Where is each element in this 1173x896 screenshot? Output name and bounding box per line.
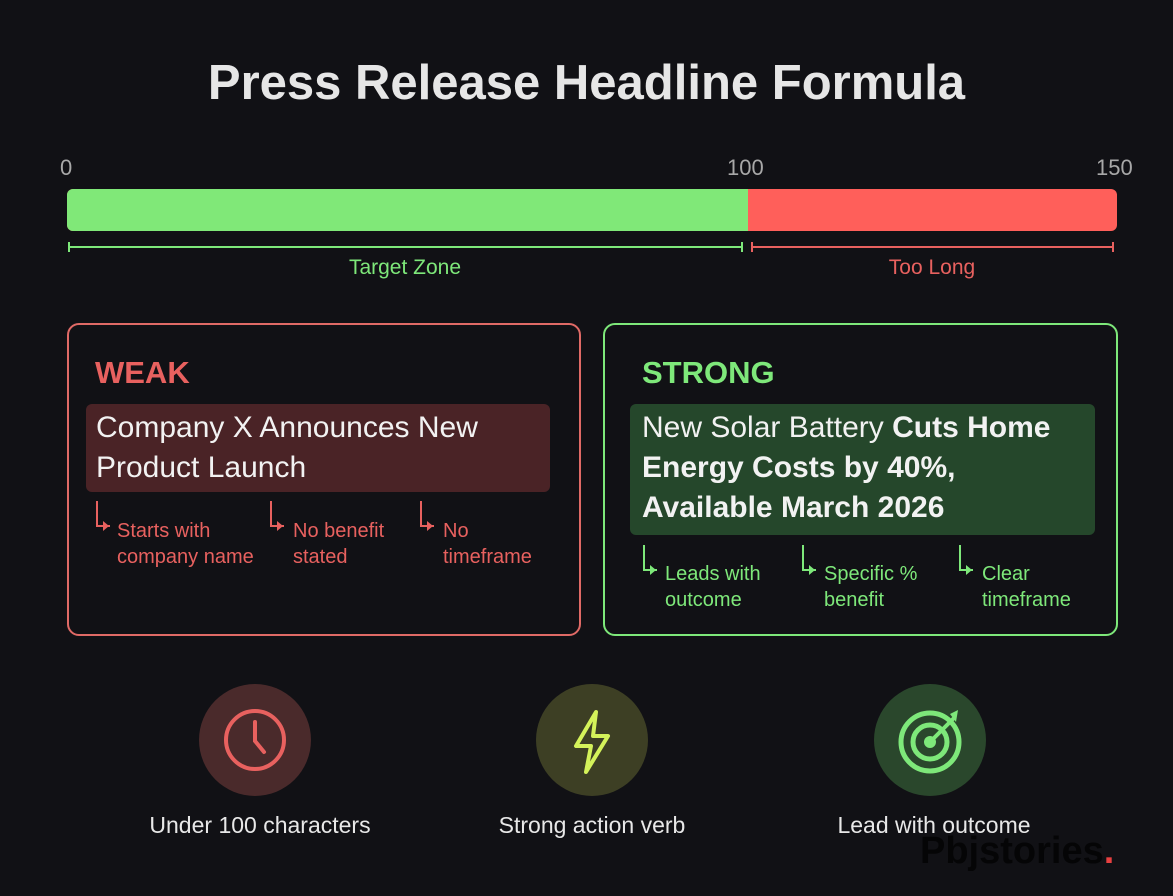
strong annotations: Clear	[982, 563, 1030, 585]
label: action verb: Strong action verb	[499, 812, 685, 838]
strong annotations: Leads with	[665, 563, 761, 585]
panel: strong	[603, 323, 1118, 636]
strong annotations: timeframe	[982, 589, 1071, 611]
weak headline: Product Launch	[96, 451, 306, 484]
bracket: too long	[751, 242, 1114, 252]
weak annotations: timeframe	[443, 546, 532, 568]
strong headline: New Solar Battery Cuts Home Energy Costs by 40%, Available March 2026	[642, 411, 1050, 524]
heading: strong: STRONG	[642, 355, 775, 390]
icon: target	[874, 684, 986, 796]
weak annotations: stated	[293, 546, 347, 568]
label: target zone: Target Zone	[349, 256, 461, 279]
strong annotations	[643, 545, 1071, 611]
label: too long: Too Long	[889, 256, 975, 279]
label: outcome: Lead with outcome	[837, 812, 1031, 838]
strong annotations: outcome	[665, 589, 742, 611]
weak annotations: No	[443, 520, 469, 542]
weak annotations: company name	[117, 546, 254, 568]
weak annotations: No benefit	[293, 520, 384, 542]
icon: clock	[199, 684, 311, 796]
strong annotations: Specific %	[824, 563, 917, 585]
watermark: Pbjstories.	[920, 830, 1114, 872]
weak annotations: Starts with	[117, 520, 210, 542]
scale labels	[60, 155, 1133, 180]
scale labels: 100	[727, 155, 764, 180]
bracket: target zone	[68, 242, 743, 252]
title: Press Release Headline Formula	[208, 56, 965, 110]
strong annotations: benefit	[824, 589, 884, 611]
label: under 100: Under 100 characters	[149, 812, 371, 838]
scale labels: 150	[1096, 155, 1133, 180]
icon: lightning	[536, 684, 648, 796]
weak headline: Company X Announces New	[96, 411, 478, 444]
length bar	[67, 189, 1117, 231]
heading: weak: WEAK	[95, 355, 190, 390]
weak headline	[86, 404, 550, 492]
panel: weak	[67, 323, 581, 636]
weak annotations	[96, 501, 532, 568]
scale labels: 0	[60, 155, 72, 180]
